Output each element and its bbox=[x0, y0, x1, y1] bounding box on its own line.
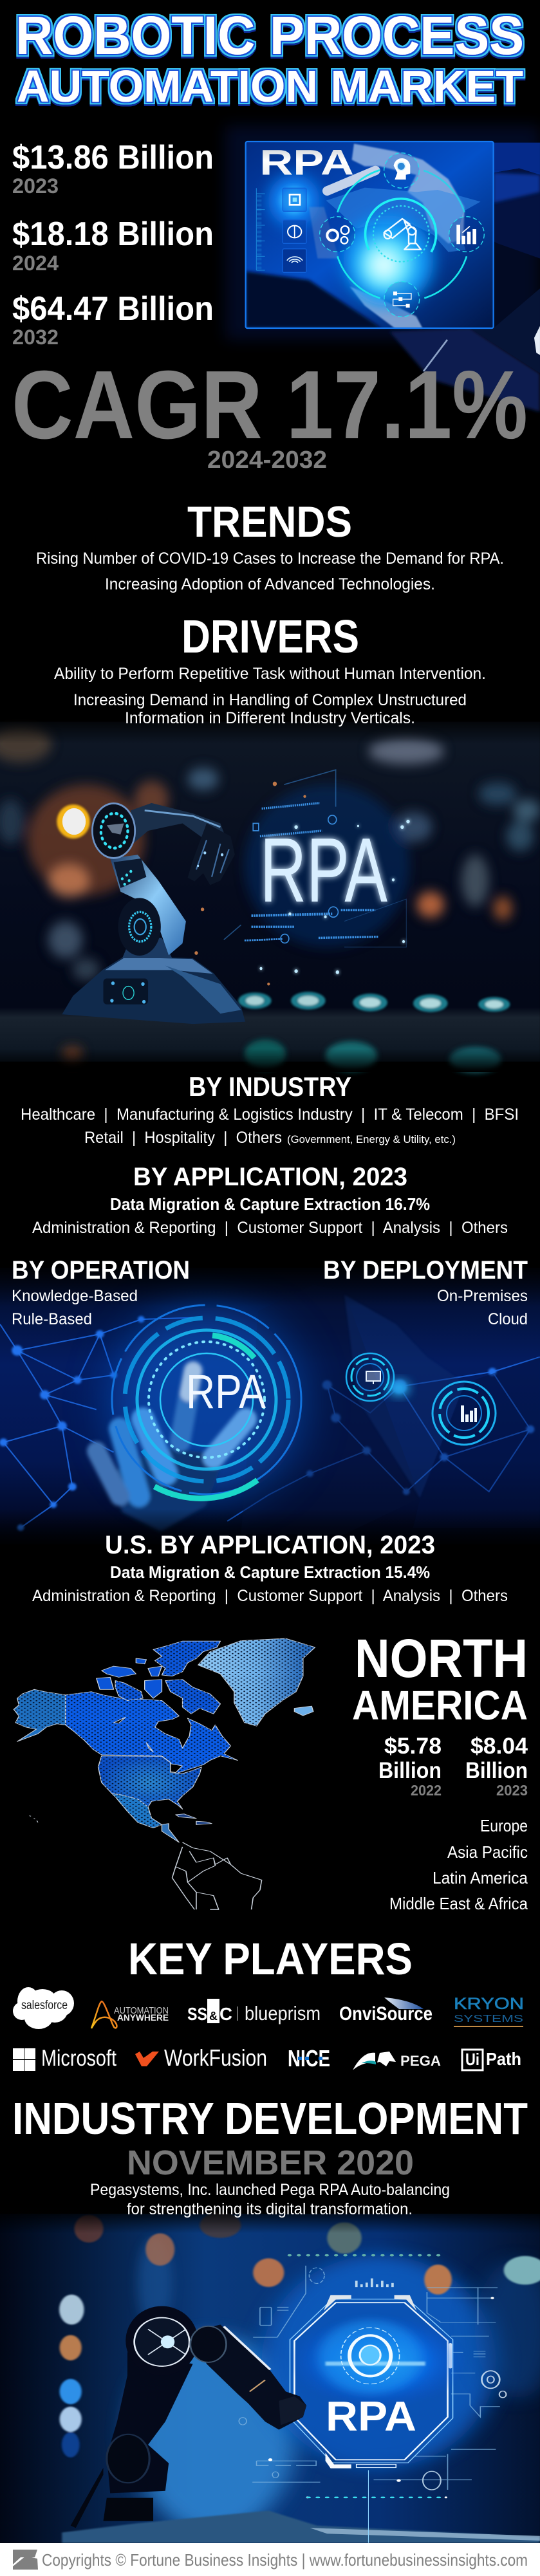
logo: SS&C blueprism: blueprism bbox=[245, 2002, 321, 2025]
central circular ring bbox=[337, 170, 467, 298]
logo: SS&C blueprism: SS bbox=[187, 2004, 207, 2024]
logo: OnviSource: OnviSource bbox=[339, 2003, 433, 2025]
logo: UiPath: Path bbox=[486, 2049, 521, 2069]
icon: left icon column bbox=[283, 188, 306, 272]
industry development section bbox=[12, 2093, 528, 2218]
heading: key players: KEY PLAYERS bbox=[128, 1934, 413, 1984]
icon: monitor ring bbox=[346, 1353, 394, 1401]
CAGR period: 2024-2032 bbox=[207, 447, 327, 474]
title line 2: AUTOMATION MARKET bbox=[17, 61, 523, 111]
value 2023: $8.04 bbox=[470, 1734, 528, 1759]
logo: WorkFusion bbox=[135, 2044, 267, 2071]
icon: robot arm bbox=[384, 219, 421, 250]
logo: PEGA: PEGA bbox=[400, 2053, 441, 2069]
hologram data lines bbox=[224, 770, 406, 947]
value 2023: $13.86 Billion bbox=[12, 139, 214, 176]
icon: chart ring bbox=[433, 1382, 496, 1445]
heading: by application: BY APPLICATION, 2023 bbox=[133, 1163, 407, 1191]
value 2023 bbox=[465, 1734, 528, 1799]
heading: by industry: BY INDUSTRY bbox=[189, 1071, 351, 1102]
operation type 2: Rule-Based bbox=[12, 1310, 92, 1328]
logo: UiPath: Ui bbox=[465, 2050, 479, 2069]
bokeh lights bbox=[59, 2212, 540, 2458]
by industry section bbox=[21, 1071, 519, 1147]
Central America bbox=[162, 1824, 179, 1842]
map: North America bbox=[14, 1638, 315, 1909]
logo: UiPath bbox=[462, 2049, 521, 2070]
Hawaii bbox=[29, 1816, 38, 1822]
figure silhouette bbox=[241, 1285, 540, 1534]
logo: SS&C blueprism: & bbox=[209, 2010, 218, 2023]
dotted rows bbox=[268, 2297, 494, 2498]
image: robot arm and RPA octagon bbox=[0, 2207, 540, 2543]
image: robot arm with RPA text bbox=[0, 714, 540, 1073]
title line 1: ROBOTIC PROCESS bbox=[15, 5, 524, 66]
operation type 1: Knowledge-Based bbox=[12, 1287, 138, 1305]
RPA label: RPA bbox=[326, 2393, 416, 2440]
lakes bbox=[114, 1717, 183, 1772]
Caribbean bbox=[176, 1814, 212, 1824]
logo: NICE: NICE bbox=[288, 2045, 330, 2071]
icon: gears bbox=[320, 217, 355, 252]
industry others note: (Government, Energy & Utility, etc.) bbox=[287, 1133, 456, 1145]
logo: PEGA bbox=[353, 2052, 441, 2070]
logo: Kryon Systems: SYSTEMS bbox=[454, 2014, 523, 2025]
deployment type 2: Cloud bbox=[488, 1310, 528, 1328]
leading application share: Data Migration & Capture Extraction 16.7% bbox=[110, 1194, 430, 1214]
hand bbox=[97, 1371, 246, 1532]
logo: WorkFusion: WorkFusion bbox=[164, 2044, 267, 2071]
industry list line 2: Retail | Hospitality | Others bbox=[84, 1129, 282, 1147]
trend 2: Increasing Adoption of Advanced Technologies. bbox=[105, 575, 435, 593]
Greenland bbox=[198, 1638, 315, 1726]
RPA rings bbox=[112, 1305, 301, 1498]
value 2022: $5.78 bbox=[384, 1734, 442, 1759]
drivers section bbox=[54, 611, 486, 727]
application list: Administration & Reporting | Customer Support | Analysis | Others bbox=[32, 1219, 508, 1237]
footer logo bbox=[13, 2550, 38, 2570]
drivers section: Information in Different Industry Verticals. bbox=[125, 709, 415, 727]
heading: U.S. by application: U.S. BY APPLICATION, 2023 bbox=[105, 1531, 435, 1559]
logo: salesforce: salesforce bbox=[21, 1999, 68, 2012]
North America stats: AMERICA bbox=[352, 1682, 528, 1728]
network mesh bbox=[0, 1316, 540, 1531]
logo: automation anywhere: ANYWHERE bbox=[117, 2012, 169, 2023]
logo: Kryon Systems: KRYON bbox=[454, 1995, 524, 2013]
logo: SS&C blueprism: C bbox=[219, 2004, 232, 2024]
leading U.S. application share: Data Migration & Capture Extraction 15.4% bbox=[110, 1562, 430, 1582]
development text: Pegasystems, Inc. launched Pega RPA Auto-balancing bbox=[90, 2181, 450, 2199]
icon: gear head bbox=[384, 153, 419, 188]
year 2023: 2023 bbox=[12, 174, 59, 198]
heading: drivers: DRIVERS bbox=[182, 611, 359, 663]
logo: Microsoft: Microsoft bbox=[41, 2046, 116, 2071]
year 2024: 2024 bbox=[12, 252, 59, 275]
image: hand touching RPA rings on network background bbox=[0, 1261, 540, 1548]
value 2032: $64.47 Billion bbox=[12, 290, 214, 328]
robot arm bbox=[71, 2306, 306, 2528]
value 2024: $18.18 Billion bbox=[12, 216, 214, 253]
year 2032: 2032 bbox=[12, 326, 59, 349]
driver 2: Increasing Demand in Handling of Complex Unstructured bbox=[73, 691, 467, 709]
RPA label: RPA bbox=[259, 143, 354, 183]
trends section bbox=[36, 497, 504, 593]
logo: Microsoft bbox=[13, 2046, 116, 2071]
market values bbox=[12, 139, 214, 349]
by deployment block bbox=[323, 1256, 528, 1328]
sparkles bbox=[259, 820, 410, 974]
logo: automation anywhere: AUTOMATION bbox=[114, 2005, 169, 2016]
Arctic islands bbox=[97, 1641, 220, 1714]
logo: automation anywhere bbox=[91, 2001, 169, 2028]
by application section bbox=[32, 1163, 508, 1237]
by operation block bbox=[12, 1256, 190, 1328]
bokeh lights bbox=[238, 992, 510, 1073]
logo: salesforce bbox=[13, 1987, 74, 2029]
date: NOVEMBER 2020 bbox=[127, 2144, 414, 2182]
value 2022: Billion bbox=[378, 1758, 442, 1783]
driver 1: Ability to Perform Repetitive Task without Human Intervention. bbox=[54, 665, 486, 683]
central gear glow bbox=[289, 2315, 469, 2408]
value 2023: Billion bbox=[465, 1758, 528, 1783]
icon: vertical scale bbox=[256, 188, 265, 270]
image: hand holding RPA holographic panel bbox=[225, 125, 540, 412]
robot arm bbox=[62, 803, 245, 1024]
other regions: Asia Pacific bbox=[447, 1842, 528, 1862]
U.S. by application section bbox=[32, 1531, 508, 1605]
U.S. application list: Administration & Reporting | Customer Support | Analysis | Others bbox=[32, 1587, 508, 1605]
value 2022: 2022 bbox=[411, 1782, 442, 1799]
dotted overlay bbox=[14, 1638, 315, 1828]
logo: Kryon Systems bbox=[454, 1995, 524, 2027]
circuit lines bbox=[239, 2266, 506, 2490]
Alaska bbox=[14, 1689, 66, 1741]
Canada bbox=[66, 1692, 237, 1774]
other regions bbox=[389, 1816, 528, 1913]
logo: OnviSource bbox=[339, 1997, 433, 2025]
Mexico bbox=[112, 1793, 162, 1828]
North America stats bbox=[352, 1628, 528, 1913]
trend 1: Rising Number of COVID-19 Cases to Increase the Demand for RPA. bbox=[36, 550, 504, 568]
icon: bar chart bbox=[449, 217, 484, 252]
icon: process flow bbox=[384, 282, 420, 317]
industry development section: for strengthening its digital transformation. bbox=[127, 2200, 413, 2218]
company logos bbox=[13, 1987, 524, 2071]
RPA label in ring: RPA bbox=[186, 1365, 266, 1418]
deployment type 1: On-Premises bbox=[437, 1287, 528, 1305]
RPA octagon bbox=[290, 2295, 453, 2469]
other regions: Latin America bbox=[433, 1868, 528, 1887]
other regions: Europe bbox=[480, 1816, 528, 1835]
other regions: Middle East & Africa bbox=[389, 1894, 528, 1913]
title bbox=[15, 5, 524, 111]
heading: by operation: BY OPERATION bbox=[12, 1256, 190, 1284]
RPA hologram text: RPA bbox=[260, 819, 387, 922]
heading: trends: TRENDS bbox=[187, 497, 352, 546]
United States bbox=[98, 1756, 201, 1809]
logo: SS&C blueprism bbox=[187, 1999, 321, 2025]
South America outlines bbox=[172, 1842, 262, 1909]
footer bbox=[0, 2543, 540, 2576]
value 2023: 2023 bbox=[496, 1782, 528, 1799]
heading: by deployment: BY DEPLOYMENT bbox=[323, 1256, 528, 1284]
floor bbox=[62, 2510, 540, 2543]
value 2022 bbox=[378, 1734, 442, 1799]
Iceland bbox=[294, 1706, 313, 1716]
industry list line 1: Healthcare | Manufacturing & Logistics Industry | IT & Telecom | BFSI bbox=[21, 1106, 519, 1124]
